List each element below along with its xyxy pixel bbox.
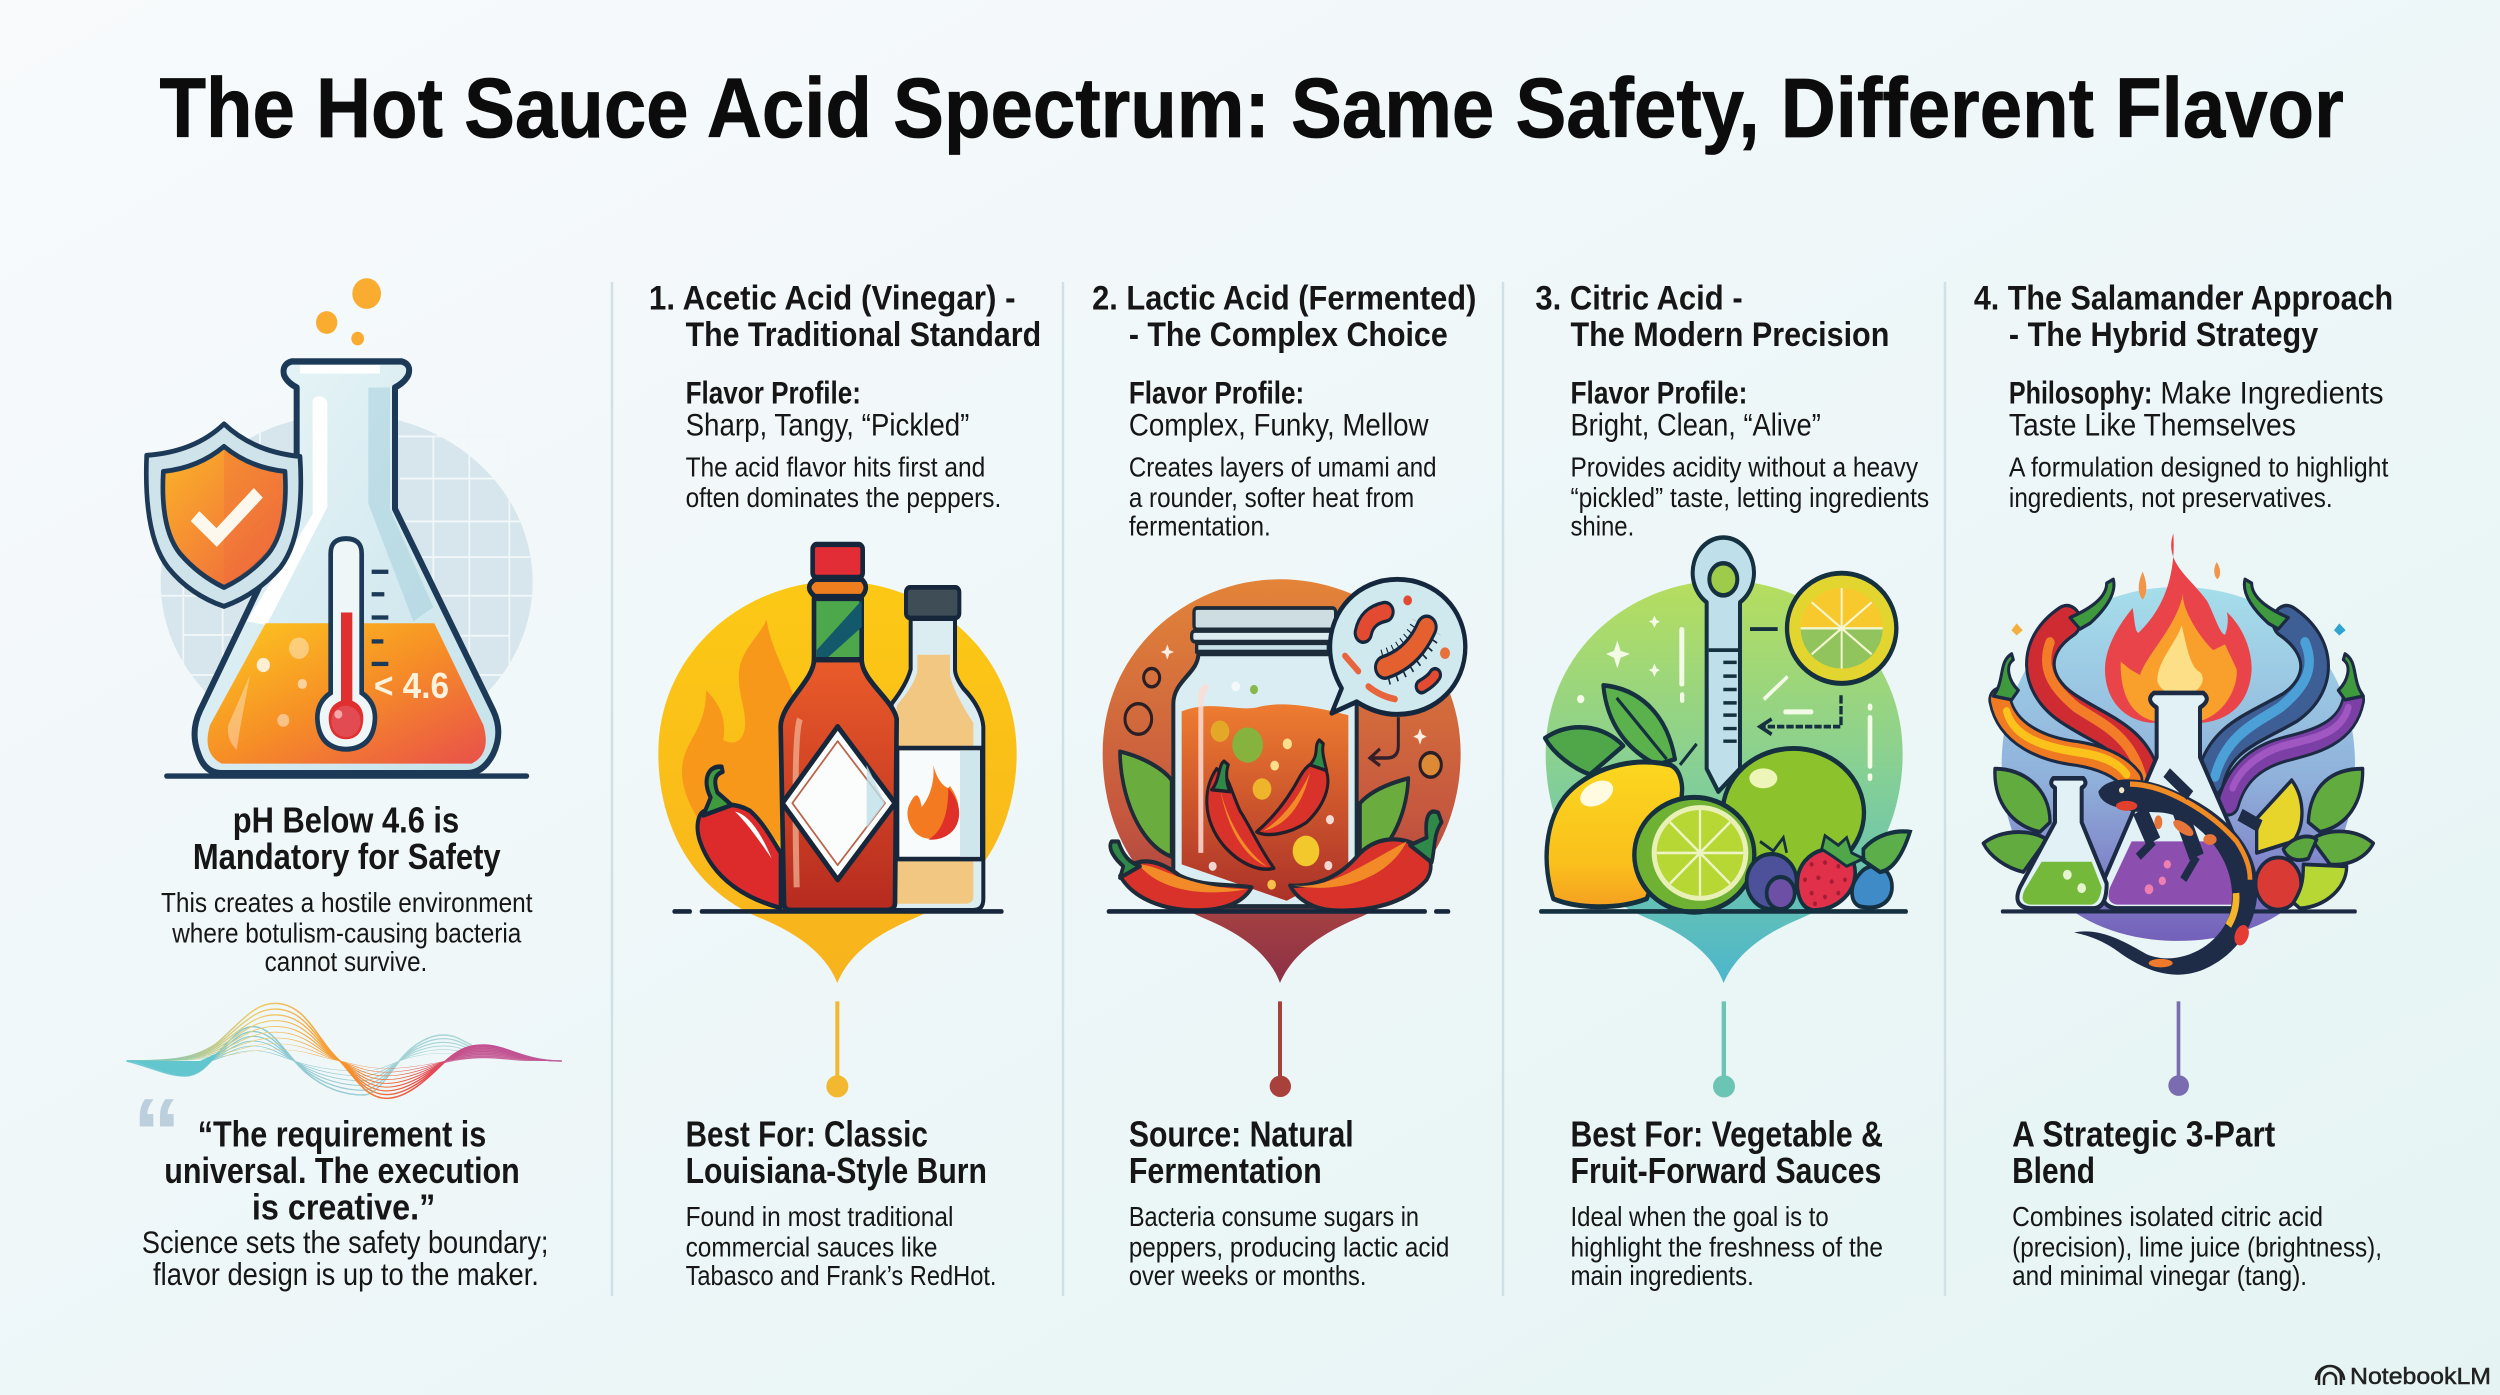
acetic text bottom: Louisiana-Style Burn	[686, 1151, 987, 1191]
lactic text top: fermentation.	[1129, 511, 1271, 542]
left flask	[2017, 778, 2107, 908]
floating specks	[1209, 681, 1334, 890]
salamander text top: 4. The Salamander Approach	[1974, 279, 2393, 317]
lactic text bottom: over weeks or months.	[1129, 1260, 1366, 1291]
red bottle	[781, 544, 897, 910]
pH label: < 4.6	[374, 667, 449, 706]
icon: citrus fruit and thermometer	[1541, 538, 1910, 1097]
decorative bubbles	[1125, 668, 1441, 777]
red teardrop	[1103, 579, 1461, 983]
acetic text bottom: Best For: Classic	[686, 1114, 928, 1154]
citric text bottom: highlight the freshness of the	[1570, 1231, 1883, 1262]
yellow teardrop	[658, 581, 1017, 983]
jar liquid	[1182, 704, 1348, 901]
red pepper	[698, 767, 781, 908]
thermometer	[1693, 538, 1754, 792]
acetic text bottom: Tabasco and Frank’s RedHot.	[686, 1260, 996, 1291]
column dividers	[612, 282, 1945, 1296]
citric text bottom: main ingredients.	[1570, 1260, 1754, 1291]
flask liquid	[208, 623, 486, 764]
backdrop circle	[2002, 587, 2355, 941]
quote subtext	[142, 1225, 548, 1292]
ground line	[674, 905, 1002, 917]
icon: fermentation jar	[1103, 579, 1465, 1097]
acetic text top: The acid flavor hits first and	[686, 452, 985, 483]
lactic text bottom: peppers, producing lactic acid	[1129, 1231, 1449, 1262]
salamander text top	[1974, 279, 2393, 513]
salamander text top: Taste Like Themselves	[2009, 407, 2296, 442]
panel: salamander approach	[1974, 279, 2393, 1291]
quote text: universal. The execution	[164, 1151, 520, 1191]
safety body: where botulism-causing bacteria	[171, 917, 522, 948]
leaves	[1545, 685, 1697, 774]
vinegar bottle	[892, 587, 983, 910]
pepper stems	[1993, 579, 2363, 700]
NotebookLM badge: NotebookLM	[2350, 1363, 2491, 1389]
whole lime	[1723, 748, 1864, 877]
quote text: “The requirement is	[198, 1114, 486, 1154]
ground line	[1109, 905, 1448, 917]
flame	[682, 619, 793, 841]
acetic text bottom	[686, 1114, 996, 1291]
lactic text bottom: Fermentation	[1129, 1151, 1322, 1191]
salamander	[2074, 773, 2260, 975]
citric text bottom: Best For: Vegetable &	[1570, 1114, 1883, 1154]
salamander text bottom: Blend	[2012, 1151, 2095, 1191]
citric text top: Flavor Profile:	[1570, 375, 1747, 410]
acetic text top: The Traditional Standard	[686, 316, 1041, 354]
strawberry seeds	[1803, 860, 1847, 906]
safety heading: pH Below 4.6 is	[233, 800, 459, 840]
bubbles	[316, 278, 381, 345]
panel: lactic acid	[1092, 279, 1476, 1291]
lemon	[1547, 762, 1683, 907]
diamonds	[2011, 623, 2346, 636]
lactic text bottom	[1129, 1114, 1449, 1291]
jar peppers	[1207, 740, 1328, 869]
salamander text bottom: Combines isolated citric acid	[2012, 1201, 2323, 1232]
salamander text top: - The Hybrid Strategy	[2009, 316, 2318, 354]
lactic text top: - The Complex Choice	[1129, 316, 1448, 354]
jar lid	[1192, 608, 1336, 652]
citric text bottom: Ideal when the goal is to	[1570, 1201, 1829, 1232]
acetic text top: Flavor Profile:	[686, 375, 861, 410]
ground line	[1541, 905, 1906, 917]
bottom peppers	[1110, 811, 1442, 911]
flask highlight	[247, 396, 327, 625]
citric text top: Provides acidity without a heavy	[1570, 452, 1918, 483]
icon: salamander, peppers and flasks	[1983, 533, 2373, 1096]
quote mark: “	[133, 1078, 181, 1186]
panel: safety text	[161, 800, 533, 977]
quote subtext: Science sets the safety boundary;	[142, 1225, 548, 1260]
connector	[2168, 1001, 2189, 1096]
lactic text bottom: Source: Natural	[1129, 1114, 1354, 1154]
flavor wave	[127, 1003, 562, 1098]
salamander text bottom: and minimal vinegar (tang).	[2012, 1260, 2307, 1291]
leaves	[1983, 769, 2373, 872]
thermometer	[317, 539, 375, 749]
acetic text bottom: Found in most traditional	[686, 1201, 953, 1232]
citric text top: shine.	[1570, 511, 1634, 542]
safety body	[161, 887, 533, 977]
lime wedges and tomato	[2256, 780, 2347, 910]
lactic text top	[1092, 279, 1476, 542]
flask glass	[195, 361, 498, 773]
safety body: cannot survive.	[265, 946, 427, 977]
leaves	[1120, 752, 1408, 864]
connector	[1270, 1001, 1291, 1097]
acetic text top: often dominates the peppers.	[686, 482, 1001, 513]
connector	[826, 1001, 848, 1097]
microscope bubble	[1330, 579, 1465, 714]
connector	[1713, 1001, 1735, 1097]
salamander text bottom: A Strategic 3-Part	[2012, 1114, 2275, 1154]
citric text bottom: Fruit-Forward Sauces	[1570, 1151, 1881, 1191]
lactic text bottom: Bacteria consume sugars in	[1129, 1201, 1419, 1232]
lactic text top: Creates layers of umami and	[1129, 452, 1437, 483]
jar highlight	[1198, 684, 1209, 853]
quote text	[164, 1114, 520, 1228]
arrow to jar	[1370, 717, 1398, 766]
lime highlight	[1749, 768, 1777, 788]
peppers as ribbons	[2000, 621, 2353, 803]
quote subtext: flavor design is up to the maker.	[153, 1257, 539, 1292]
safety heading: Mandatory for Safety	[193, 837, 501, 877]
panel: citric acid	[1535, 279, 1929, 1291]
citric text top: 3. Citric Acid -	[1535, 279, 1743, 317]
lactic text top: Complex, Funky, Mellow	[1129, 407, 1429, 442]
salamander text bottom	[2012, 1114, 2382, 1291]
shield	[146, 424, 301, 606]
connector marks	[1750, 629, 1841, 734]
citric text bottom	[1570, 1114, 1883, 1291]
backdrop circle with grid	[132, 411, 562, 751]
quote text: is creative.”	[252, 1188, 435, 1228]
lime half	[1634, 797, 1754, 912]
panel: acetic acid	[649, 279, 1041, 1291]
acetic text top: 1. Acetic Acid (Vinegar) -	[649, 279, 1016, 317]
sparkles and dashes	[1577, 616, 1872, 781]
berries	[1747, 831, 1910, 910]
icon: flask with shield and thermometer	[132, 278, 562, 776]
citric text top: Bright, Clean, “Alive”	[1570, 407, 1821, 442]
jar glass	[1173, 654, 1357, 906]
acetic text top: Sharp, Tangy, “Pickled”	[686, 407, 969, 442]
flask rim highlight	[300, 365, 380, 374]
salamander text top: Philosophy:	[2009, 375, 2152, 410]
lactic text top: 2. Lactic Acid (Fermented)	[1092, 279, 1476, 317]
icon: hot sauce bottles	[658, 544, 1017, 1097]
acetic text top	[649, 279, 1041, 513]
citrus slice	[1787, 573, 1896, 683]
flame	[2105, 533, 2252, 723]
green teardrop	[1546, 580, 1903, 983]
center flask	[2102, 693, 2248, 908]
ground line	[167, 769, 527, 784]
safety body: This creates a hostile environment	[161, 887, 533, 918]
ground line	[2003, 906, 2355, 917]
citric text top: The Modern Precision	[1570, 316, 1889, 354]
acetic text bottom: commercial sauces like	[686, 1231, 938, 1262]
lactic text top: a rounder, softer heat from	[1129, 482, 1414, 513]
sparkles	[1161, 644, 1427, 745]
citric text top: “pickled” taste, letting ingredients	[1570, 482, 1929, 513]
lemon highlight	[1577, 775, 1616, 812]
salamander text top: ingredients, not preservatives.	[2009, 482, 2333, 513]
thermometer ticks	[372, 570, 388, 666]
salamander text bottom: (precision), lime juice (brightness),	[2012, 1231, 2382, 1262]
safety heading	[193, 800, 501, 877]
icon: NotebookLM mark	[2316, 1366, 2344, 1385]
lactic text top: Flavor Profile:	[1129, 375, 1304, 410]
salamander text top: A formulation designed to highlight	[2009, 452, 2389, 483]
flask neck shading	[368, 387, 433, 621]
quote	[142, 1114, 548, 1292]
salamander text top: Make Ingredients	[2160, 375, 2384, 410]
liquid bubbles	[228, 637, 309, 750]
citric text top	[1535, 279, 1929, 542]
